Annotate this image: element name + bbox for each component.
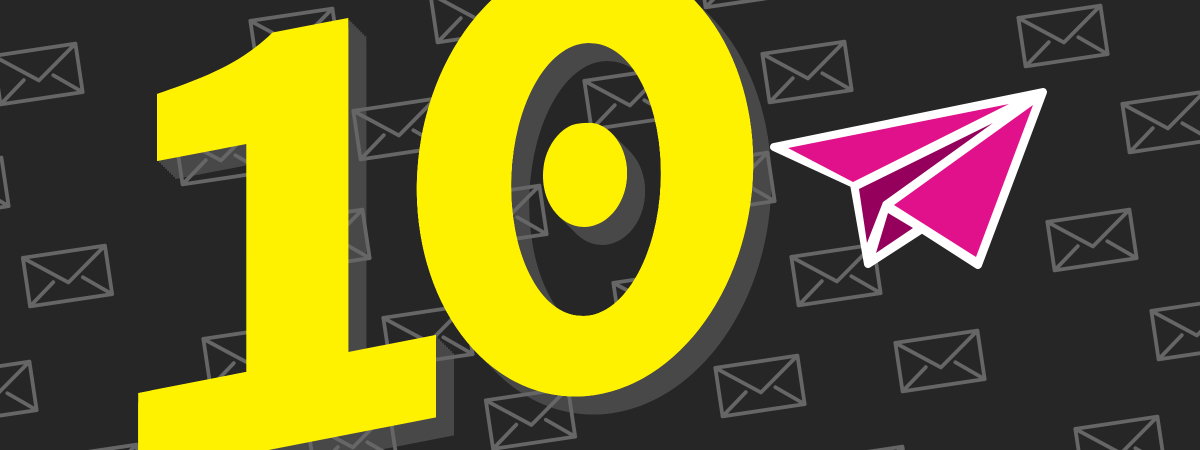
inner fold	[859, 123, 993, 243]
right wing	[894, 105, 1033, 257]
shadow of number 10	[73, 0, 853, 450]
number 10	[138, 0, 754, 450]
plane outline	[774, 92, 1043, 265]
lower fold	[876, 213, 913, 253]
icon: paper plane	[774, 92, 1043, 265]
left wing	[788, 104, 1009, 182]
